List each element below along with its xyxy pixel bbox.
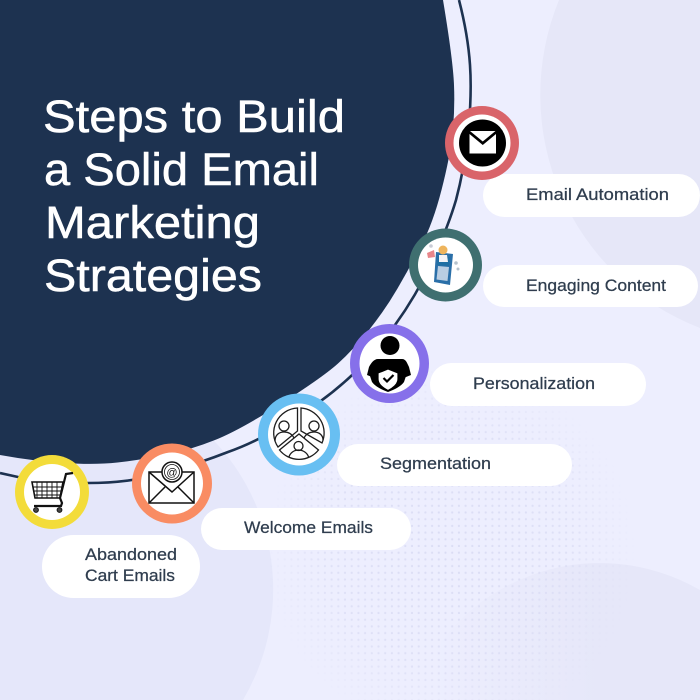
- label pill: personalization: Personalization: [473, 374, 595, 393]
- label pill: segmentation: Segmentation: [380, 454, 491, 473]
- icon: phone with person and megaphone: [409, 228, 482, 302]
- label pill: welcome emails: [201, 508, 411, 550]
- connecting arc line: [0, 0, 471, 483]
- icon: person holding shield: [350, 324, 429, 403]
- icon: envelope with at sign: [132, 444, 212, 524]
- step: segmentation: [258, 394, 572, 486]
- title: Marketing: [45, 197, 260, 248]
- title: Steps to Build: [43, 91, 345, 142]
- label pill: abandoned cart emails: Abandoned: [85, 545, 177, 564]
- step: email automation: [445, 106, 700, 217]
- dark navy circle: [0, 0, 454, 464]
- icon: segmented audience circle: [258, 394, 340, 476]
- label pill: abandoned cart emails: Cart Emails: [85, 566, 175, 585]
- step: personalization: [350, 324, 646, 406]
- step: engaging content: [409, 228, 698, 307]
- icon: envelope with at sign: @: [166, 467, 178, 479]
- title: a Solid Email: [44, 144, 319, 195]
- label pill: email automation: Email Automation: [526, 185, 669, 204]
- title: [43, 91, 345, 301]
- icon: envelope on black disc: [445, 106, 519, 180]
- label pill: personalization: [430, 363, 646, 406]
- title: Strategies: [44, 250, 262, 301]
- step: welcome emails: [132, 444, 411, 550]
- step: abandoned cart emails: [15, 455, 200, 598]
- label pill: email automation: [483, 174, 700, 217]
- label pill: segmentation: [337, 444, 572, 486]
- label pill: welcome emails: Welcome Emails: [244, 518, 373, 537]
- icon: shopping cart: [15, 455, 89, 529]
- background: [270, 404, 628, 700]
- label pill: engaging content: [483, 265, 698, 307]
- label pill: engaging content: Engaging Content: [526, 276, 666, 295]
- label pill: abandoned cart emails: [42, 535, 200, 598]
